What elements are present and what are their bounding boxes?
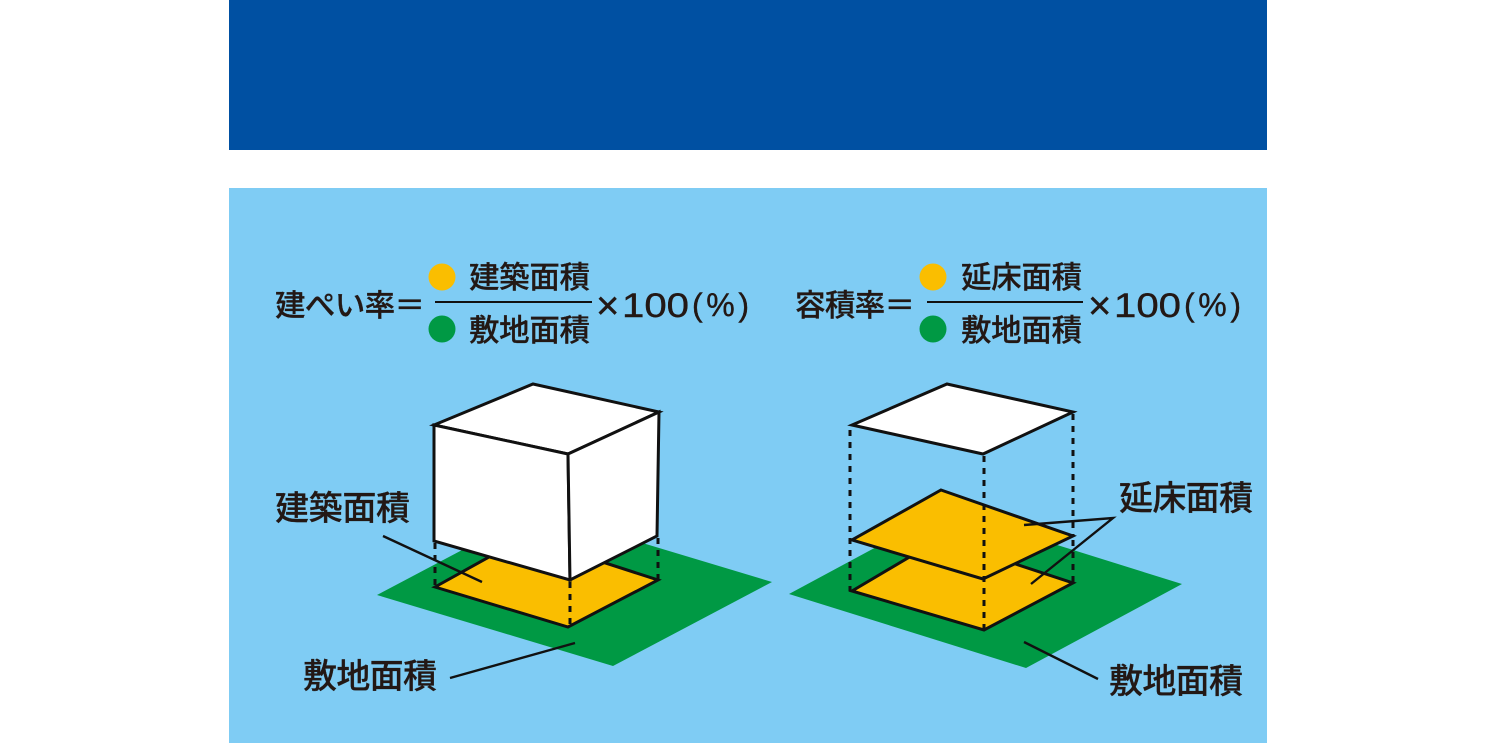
numerator: 建築面積: [469, 261, 590, 295]
icon: green circle: [920, 316, 946, 342]
icon: green circle: [428, 316, 456, 342]
cube side face: [568, 412, 659, 580]
multiplier: ×: [596, 284, 619, 328]
top floor: white plane: [852, 384, 1073, 454]
percent unit: (%): [692, 287, 749, 323]
denominator: 敷地面積: [961, 314, 1082, 348]
denominator: 敷地面積: [469, 314, 590, 348]
fraction bar: [435, 301, 592, 303]
leader line: building area: [383, 536, 482, 582]
number 100: 100: [1114, 287, 1181, 325]
cube: white building: [434, 384, 659, 580]
leader line: site area: [450, 643, 575, 678]
diagram: building on site: [275, 384, 772, 696]
ground floor: yellow plane: [852, 539, 1073, 630]
numerator: 延床面積: [961, 261, 1082, 295]
icon: yellow circle: [428, 264, 456, 290]
multiplier: ×: [1088, 284, 1111, 328]
icon: yellow circle: [920, 264, 946, 290]
percent unit: (%): [1184, 287, 1241, 323]
label: floor area: 延床面積: [1119, 480, 1253, 518]
formula label: 容積率＝: [795, 289, 915, 323]
label: building area: 建築面積: [275, 490, 410, 528]
diagram: floor planes on site: [789, 384, 1253, 701]
cube top: [434, 384, 659, 454]
dashed projection lines: [850, 414, 1073, 630]
number 100: 100: [622, 287, 689, 325]
panel: light blue background: [229, 188, 1267, 743]
label: site area: 敷地面積: [303, 658, 437, 696]
site area: green plane: [789, 510, 1182, 668]
label: site area: 敷地面積: [1109, 663, 1243, 701]
formula label: 建ぺい率＝: [275, 289, 425, 323]
formula: floor area ratio: [795, 261, 1241, 348]
header band: [229, 0, 1267, 150]
site area: green plane: [377, 511, 772, 666]
building footprint: yellow plane: [435, 537, 658, 627]
formula: building coverage ratio: [275, 261, 749, 348]
leader line: site area: [1024, 642, 1098, 679]
cube front face: [434, 425, 570, 580]
dashed projection lines: [435, 538, 658, 627]
leader lines: floor area: [1024, 518, 1113, 584]
middle floor: yellow plane: [852, 490, 1073, 579]
fraction bar: [927, 301, 1083, 303]
